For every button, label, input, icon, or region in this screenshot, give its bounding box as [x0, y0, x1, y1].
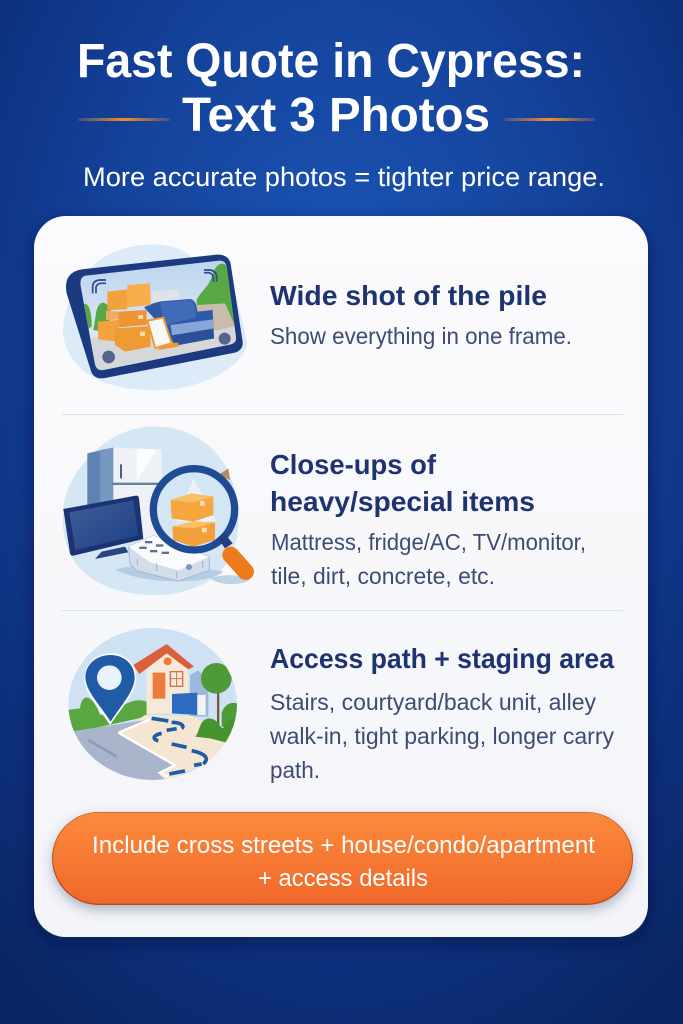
text: access path description: walk-in, tight parking, longer carry	[269, 723, 614, 749]
heading: access path: Access path + staging area	[270, 643, 614, 674]
text: close-ups description: Mattress, fridge/AC, TV/monitor,	[271, 529, 586, 555]
text: close-ups description	[271, 529, 586, 589]
heading: close-ups: heavy/special items	[270, 486, 535, 517]
callout: orange button	[52, 812, 633, 905]
title	[77, 35, 595, 142]
heading: close-ups: Close-ups of	[270, 449, 437, 480]
title: Text 3 Photos	[182, 89, 490, 142]
callout: orange button: Include cross streets + house/condo/apartment	[92, 832, 595, 859]
icon: appliances under magnifier	[63, 427, 250, 595]
text: access path description: Stairs, courtyard/back unit, alley	[270, 689, 596, 715]
panel: checklist card	[34, 216, 648, 937]
subtitle: More accurate photos = tighter price range.	[83, 162, 605, 192]
text: access path description: path.	[270, 757, 320, 783]
text: close-ups description: tile, dirt, concrete, etc.	[271, 563, 495, 589]
heading: wide shot: Wide shot of the pile	[270, 280, 547, 311]
text: wide shot description: Show everything in one frame.	[270, 323, 572, 349]
text: access path description	[269, 689, 614, 783]
callout: orange button: + access details	[258, 865, 428, 892]
icon: phone photographing pile	[63, 244, 247, 390]
title: Fast Quote in Cypress:	[77, 35, 585, 88]
icon: house with access path	[68, 628, 237, 780]
heading: close-ups	[270, 449, 535, 517]
